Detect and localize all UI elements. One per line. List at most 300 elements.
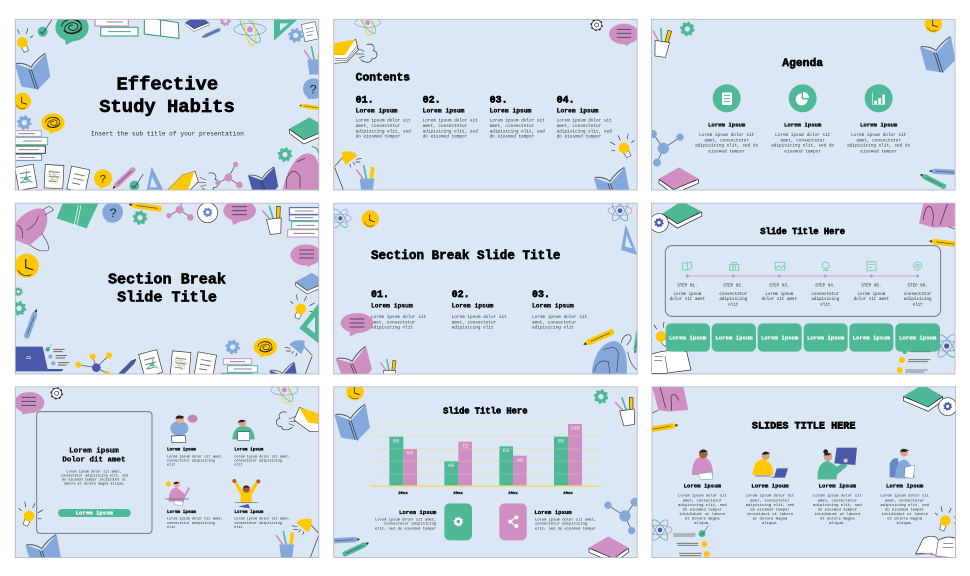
icon: yellow pencil: [929, 238, 960, 248]
icon: laptop: [15, 347, 63, 371]
icon: atom paper: [170, 351, 191, 376]
bar chart: 40: [448, 463, 454, 469]
step 1: [670, 284, 706, 302]
icon: puff: [356, 44, 377, 62]
icon: green book: [662, 200, 702, 229]
agenda item 2: Lorem ipsum dolor sit: [775, 133, 831, 138]
figure text 2: [746, 483, 794, 526]
caption 3: [167, 510, 223, 530]
figure text 2: adipisicing elit, sed: [746, 503, 794, 508]
column 02: do eiusmod tempor: [423, 135, 468, 140]
icon: yellow question bubble: ?: [100, 175, 106, 187]
step 3: [762, 284, 798, 302]
agenda item 1: eiusmod tempor: [708, 149, 745, 154]
column 03: 03.: [490, 94, 508, 105]
figure: person writing: [692, 450, 713, 479]
icon: green thought bubble: [55, 20, 89, 45]
icon: check mark bottom: [129, 174, 143, 191]
icon: blue pencil: [331, 537, 360, 543]
figure text 1: incididunt ut labore: [679, 512, 726, 517]
icon: atom right: [608, 198, 632, 223]
column 03: [532, 289, 588, 330]
agenda item 1: adipisicing elit, sed do: [695, 144, 759, 149]
icon: checklist: [45, 344, 69, 365]
figure: student with backpack: [890, 449, 915, 478]
agenda item 2: Lorem ipsum: [784, 122, 822, 129]
icon: top book stack: [94, 20, 139, 37]
bar chart: 20xx: [453, 492, 463, 496]
button labels: Lorem ipsum: [853, 334, 891, 341]
agenda item 3: eiusmod tempor: [860, 149, 897, 154]
column 03: amet, consectetur: [490, 124, 535, 129]
icon: blue question bubble: [102, 202, 123, 223]
right text block: elit, sed do eiusmod tempor: [535, 527, 596, 532]
icon: green book: [289, 117, 318, 144]
button labels: Lorem ipsum: [899, 334, 937, 341]
figure text 1: Lorem ipsum dolor sit: [678, 494, 727, 499]
caption 3: Lorem ipsum: [167, 510, 196, 515]
figure text 3: do eiusmod tempor: [818, 508, 857, 513]
agenda item 3: adipisicing elit, sed do: [847, 144, 911, 149]
slide title: Slide Title Here: [443, 407, 527, 417]
step 4: consectetur: [811, 292, 840, 297]
figure text 1: aliqua.: [694, 521, 710, 526]
icon: atom: [933, 332, 960, 360]
bar chart: 20xx: [398, 492, 408, 496]
icon: pink speech bubble: [14, 392, 44, 415]
icon: green ruler: [274, 20, 298, 40]
icon: bulb: [643, 318, 677, 352]
slide background: [334, 203, 637, 374]
icon: blue book: [296, 273, 327, 294]
column 04: do eiusmod tempor: [557, 135, 602, 140]
button: [58, 509, 131, 517]
figure text 3: amet, consectetur: [818, 499, 857, 503]
figure text 3: adipisicing elit, sed: [813, 503, 862, 508]
icon: pink molecule: [215, 162, 243, 188]
column 03: [490, 94, 545, 140]
icon: blue book: [15, 53, 50, 89]
icon: green gear: [134, 211, 146, 224]
column 03: Lorem ipsum: [490, 107, 532, 114]
agenda item 2: amet, consectetur: [780, 138, 825, 143]
column 04: Lorem ipsum dolor sit: [557, 119, 612, 124]
bar chart: 48: [517, 457, 523, 463]
icon: blue ruler: [621, 224, 637, 255]
slide background: [334, 19, 637, 190]
slide background: [15, 203, 319, 374]
bar chart: 20xx: [563, 492, 573, 496]
panel heading: [62, 447, 126, 465]
icon: yellow pencil: [299, 104, 318, 110]
icon: green gear tile: [444, 503, 472, 540]
icon: blue pencil: [929, 168, 958, 175]
column 01: Lorem ipsum: [371, 303, 413, 310]
icon: gear bubble: [198, 203, 218, 223]
column 03: adipisicing elit, sed: [490, 129, 545, 134]
caption 2: Lorem ipsum dolor sit amet,: [234, 454, 290, 459]
icon: pink speech bubble: [341, 313, 373, 337]
caption 2: Lorem ipsum: [234, 448, 264, 453]
figure text 1: adipisicing elit, sed: [678, 503, 727, 508]
title: Effective: [116, 73, 218, 95]
figure text 4: incididunt ut labore: [881, 512, 929, 517]
panel: slide 7 four people: [13, 376, 320, 571]
figure: student celebrating: [232, 479, 260, 508]
icon: pink gear: [220, 20, 231, 26]
column 02: [452, 289, 507, 330]
icon: gear bubble: [650, 214, 668, 232]
panel text: consectetur adipisicing elit, sed: [60, 473, 128, 478]
icon: yellow book: [168, 171, 198, 192]
icon: gear bubble: [939, 398, 957, 416]
caption 1: [167, 448, 223, 468]
bar chart: 80: [393, 438, 399, 444]
button labels: Lorem ipsum: [669, 334, 707, 341]
panel text: do eiusmod tempor incididunt ut: [62, 477, 126, 482]
left text block: elit, sed do eiusmod tempor: [375, 527, 436, 532]
icon: atom: [648, 518, 672, 542]
right text block: consectetur adipisicing: [535, 522, 587, 527]
step 5: STEP 05.: [861, 284, 881, 289]
icon: blue gear left: [18, 116, 31, 129]
column 04: [557, 94, 612, 140]
icon: pink book: [659, 167, 698, 194]
icon: clock: [346, 383, 364, 400]
icon: blue molecule: [649, 130, 684, 167]
figure text 4: Lorem ipsum dolor sit: [880, 494, 929, 499]
icon: navy open book: [269, 362, 298, 391]
column 02: 02.: [452, 289, 470, 300]
icon: pink bubble right: [290, 244, 322, 267]
icon: pink backpack: [652, 387, 688, 413]
figure text 4: Lorem ipsum: [886, 483, 924, 490]
figure text 2: amet, consectetur: [750, 499, 790, 503]
figure text 2: aliqua.: [762, 521, 778, 526]
step 1: dolor sit amet: [670, 297, 706, 302]
figure text 1: [678, 483, 727, 526]
bar chart: 20xx: [508, 492, 518, 496]
column 01: [371, 289, 427, 330]
icon: yellow question bubble: [94, 169, 112, 189]
bar chart: 72: [462, 444, 468, 450]
icon: clock: [15, 254, 39, 278]
column 01: 01.: [356, 94, 374, 105]
step 5: Lorem ipsum: [857, 292, 886, 297]
figure: student reading: [232, 420, 255, 440]
figure text 4: aliqua.: [897, 521, 913, 526]
icon: blue question bubble: [303, 78, 318, 100]
icon: blue backpack: [592, 335, 637, 374]
left text block: Lorem ipsum dolor sit amet,: [375, 517, 436, 522]
icon: bulb: [285, 291, 318, 323]
step 3: dolor sit amet: [762, 297, 798, 302]
figure text 3: Lorem ipsum: [819, 483, 857, 490]
panel: slide 8 chart: [331, 383, 639, 563]
column 02: 02.: [423, 94, 441, 105]
right text block: Lorem ipsum dolor sit amet,: [535, 517, 596, 522]
figure text 4: [880, 483, 929, 526]
column 04: adipisicing elit, sed: [557, 129, 612, 134]
icon: pink pencil: [112, 167, 136, 189]
caption 4: Lorem ipsum: [234, 510, 264, 515]
icon: white open book: [144, 17, 179, 38]
icon: pink book: [589, 536, 628, 563]
agenda item 3: Lorem ipsum: [860, 122, 898, 129]
column 04: Lorem ipsum: [557, 107, 599, 114]
figure text 3: incididunt ut labore: [814, 512, 861, 517]
button labels: Lorem ipsum: [715, 334, 753, 341]
icon: white cup: [380, 359, 396, 383]
column 01: Lorem ipsum dolor sit: [371, 315, 427, 320]
column 01: [356, 94, 411, 140]
column 03: amet, consectetur: [532, 320, 577, 325]
figure text 3: Lorem ipsum dolor sit: [813, 494, 862, 499]
agenda item 1: Lorem ipsum dolor sit: [699, 133, 755, 138]
button labels: Lorem ipsum: [807, 334, 845, 341]
text panel: [37, 412, 152, 533]
icon: book stack: [288, 208, 325, 237]
caption 3: elit: [167, 525, 175, 530]
icon: molecule paper: [15, 164, 37, 190]
step 3: Lorem ipsum: [765, 292, 794, 297]
icon: outline gear: [51, 388, 62, 399]
agenda item 1: [695, 122, 759, 154]
column 03: Lorem ipsum: [532, 303, 574, 310]
icon: pencil: [202, 28, 220, 38]
panel: slide 3 agenda: [649, 15, 958, 194]
column 01: Lorem ipsum dolor sit: [356, 119, 411, 124]
panel: slide 6 timeline: [643, 200, 960, 374]
step 5: dolor sit amet: [854, 297, 890, 302]
icon: white cup: [262, 205, 283, 235]
figure text 1: et dolore magna: [685, 517, 720, 522]
slide background: [334, 387, 637, 558]
column 02: amet, consectetur: [423, 124, 468, 129]
slide background: [651, 19, 955, 190]
icon: atom paper: [44, 165, 64, 189]
icon: open book: [915, 536, 956, 558]
icon: lamp: [333, 151, 362, 190]
right text block: Lorem ipsum: [534, 509, 572, 516]
figure text 4: adipisicing elit, sed: [880, 503, 929, 508]
caption 1: Lorem ipsum: [167, 448, 196, 453]
icon: blue book: [920, 37, 955, 73]
column 01: amet, consectetur: [371, 320, 416, 325]
column 02: adipisicing elit, sed: [423, 129, 478, 134]
figure: person on laptop: [752, 452, 788, 478]
icon: green pencil: [919, 172, 947, 190]
caption 4: elit: [234, 525, 243, 530]
icon: pink open book: [335, 346, 373, 384]
column 02: adipisicing elit: [452, 325, 494, 330]
caption 2: consectetur adipisicing: [234, 459, 282, 464]
column 02: [423, 94, 478, 140]
icon: green pencil: [342, 540, 370, 557]
title: Study Habits: [99, 96, 235, 118]
caption 4: Lorem ipsum dolor sit amet,: [234, 517, 290, 522]
figure text 2: do eiusmod tempor: [750, 508, 790, 513]
caption 4: [234, 510, 290, 530]
icon: molecule: [75, 352, 112, 376]
figure text 2: et dolore magna: [753, 517, 788, 522]
left text block: consectetur adipisicing: [384, 522, 436, 527]
icon: clipboard badge: [713, 84, 741, 112]
icon: bulb: [930, 503, 963, 535]
step 2: elit: [728, 302, 739, 307]
icon: green gear left: [13, 302, 25, 315]
step 4: elit: [820, 302, 831, 307]
slide background: [652, 387, 956, 558]
column 01: 01.: [371, 289, 389, 300]
agenda item 1: amet, consectetur: [704, 138, 749, 143]
icon: blue gear: [226, 341, 239, 353]
figure text 2: Lorem ipsum dolor sit: [746, 494, 794, 499]
figure text 2: Lorem ipsum: [751, 483, 789, 490]
heading: agenda: Agenda: [782, 58, 823, 70]
icon: atom: [355, 9, 380, 36]
icon: pink backpack: [15, 207, 53, 251]
column 01: adipisicing elit, sed: [356, 129, 411, 134]
figure text 3: aliqua.: [829, 521, 845, 526]
panel text: labore et dolore magna aliqua.: [63, 482, 125, 487]
icon: yellow book: [334, 39, 358, 63]
icon: yellow bubble: [254, 338, 277, 357]
icon: clock: [925, 15, 942, 33]
bar chart: 100: [570, 426, 580, 432]
left text block: [375, 509, 437, 532]
panel text: Lorem ipsum dolor sit amet,: [66, 469, 122, 474]
icon: yellow pencil: [128, 201, 162, 212]
agenda item 3: Lorem ipsum dolor sit: [851, 133, 907, 138]
figure text 3: [813, 483, 862, 526]
icon: check mark: [38, 20, 52, 37]
column 03: do eiusmod tempor: [490, 135, 535, 140]
step icons: [683, 262, 922, 271]
column 02: amet, consectetur: [452, 320, 497, 325]
figure text 1: Lorem ipsum: [684, 483, 722, 490]
caption 1: Lorem ipsum dolor sit amet,: [167, 454, 223, 459]
step 2: consectetur: [719, 292, 748, 297]
icon: blue molecule: [604, 498, 639, 534]
icon: green ruler: [299, 303, 319, 343]
button labels: Lorem ipsum: [761, 334, 799, 341]
slide title: Slide Title Here: [760, 227, 845, 237]
column 03: 03.: [532, 289, 550, 300]
panel: slide 9 four figures: [647, 385, 963, 558]
left text block: Lorem ipsum: [399, 509, 437, 516]
panel heading: Lorem ipsum: [69, 447, 119, 455]
step 6: [904, 284, 932, 307]
icon: green book: [57, 202, 98, 228]
column 01: adipisicing elit: [371, 325, 413, 330]
caption 3: consectetur adipisicing: [167, 521, 215, 526]
step 2: adipisicing: [719, 297, 748, 302]
icon: atom: [271, 376, 298, 404]
column 02: Lorem ipsum: [423, 107, 465, 114]
icon: blue question bubble: ?: [110, 206, 117, 221]
timeline line: [686, 274, 919, 277]
icon: bulb: [607, 130, 640, 162]
icon: green pencil: [633, 331, 640, 354]
agenda item 2: [771, 122, 835, 154]
figure: person at board: [818, 448, 857, 479]
icon: yellow bubble: [41, 113, 65, 134]
icon: atom left: [330, 207, 351, 229]
column 03: Lorem ipsum dolor sit: [490, 119, 545, 124]
icon: green book: [903, 385, 943, 411]
step 4: [811, 284, 840, 307]
step 6: STEP 06.: [908, 284, 928, 289]
column 04: 04.: [557, 94, 575, 105]
slide title: Section Break Slide Title: [371, 248, 560, 263]
step 6: elit: [913, 302, 923, 307]
figure text 2: incididunt ut labore: [747, 512, 794, 517]
slide title: SLIDES TITLE HERE: [752, 421, 855, 432]
icon: blue pencil: [23, 308, 39, 339]
icon: yellow book: [294, 407, 319, 432]
icon: left book stack: [10, 131, 48, 160]
section title: Section Break: [108, 271, 226, 289]
step 1: Lorem ipsum: [673, 292, 702, 297]
icon: lamp: [292, 519, 320, 557]
column 02: Lorem ipsum dolor sit: [423, 119, 478, 124]
icon: white cup: [615, 396, 637, 427]
figure: student raising hand: [165, 481, 190, 506]
icon: puff: [198, 173, 219, 191]
icon: blue book: [25, 535, 61, 571]
bar chart: 60: [407, 451, 413, 457]
icon: outline gear: [591, 19, 602, 31]
icon: molecule paper: [139, 350, 163, 377]
button labels: [669, 334, 937, 341]
icon: green gear: [279, 148, 291, 161]
agenda item 2: eiusmod tempor: [784, 149, 821, 154]
icon: pink speech bubble: [609, 24, 639, 46]
icon: blue book: [594, 167, 629, 203]
icon: cup: [356, 165, 375, 194]
icon: bulb: [13, 498, 46, 530]
icon: yellow pencil: [582, 328, 615, 347]
step 4: STEP 04.: [815, 284, 835, 289]
icon: pink molecule: [166, 203, 194, 221]
panel: slide 5 section break with columns: [330, 198, 640, 384]
icon: blue cup: [303, 46, 318, 75]
icon: blue lamp: [285, 340, 313, 379]
step 4: adipisicing: [811, 297, 840, 302]
section title: [108, 271, 226, 307]
icon: lined paper: [67, 166, 90, 193]
step 6: adipisicing: [904, 297, 932, 302]
bar chart: 63: [503, 448, 509, 454]
icon: note: [301, 22, 319, 42]
icon: puff: [276, 412, 297, 430]
figure text 1: amet, consectetur: [683, 499, 722, 503]
icon: pink speech bubble top: [223, 200, 256, 225]
icon: small green gear: [15, 288, 22, 295]
icon: navy book: [185, 20, 210, 32]
column 04: amet, consectetur: [557, 124, 602, 129]
icon: white cup: [650, 27, 672, 58]
icon: blue gear: [289, 29, 302, 42]
button: Lorem ipsum: [76, 510, 114, 517]
caption 1: elit: [167, 463, 175, 468]
column 02: Lorem ipsum dolor sit: [452, 315, 507, 320]
figure text 4: do eiusmod tempor: [885, 508, 924, 513]
figure text 3: et dolore magna: [820, 517, 855, 522]
agenda item 3: [847, 122, 911, 154]
bar chart: [371, 423, 601, 496]
